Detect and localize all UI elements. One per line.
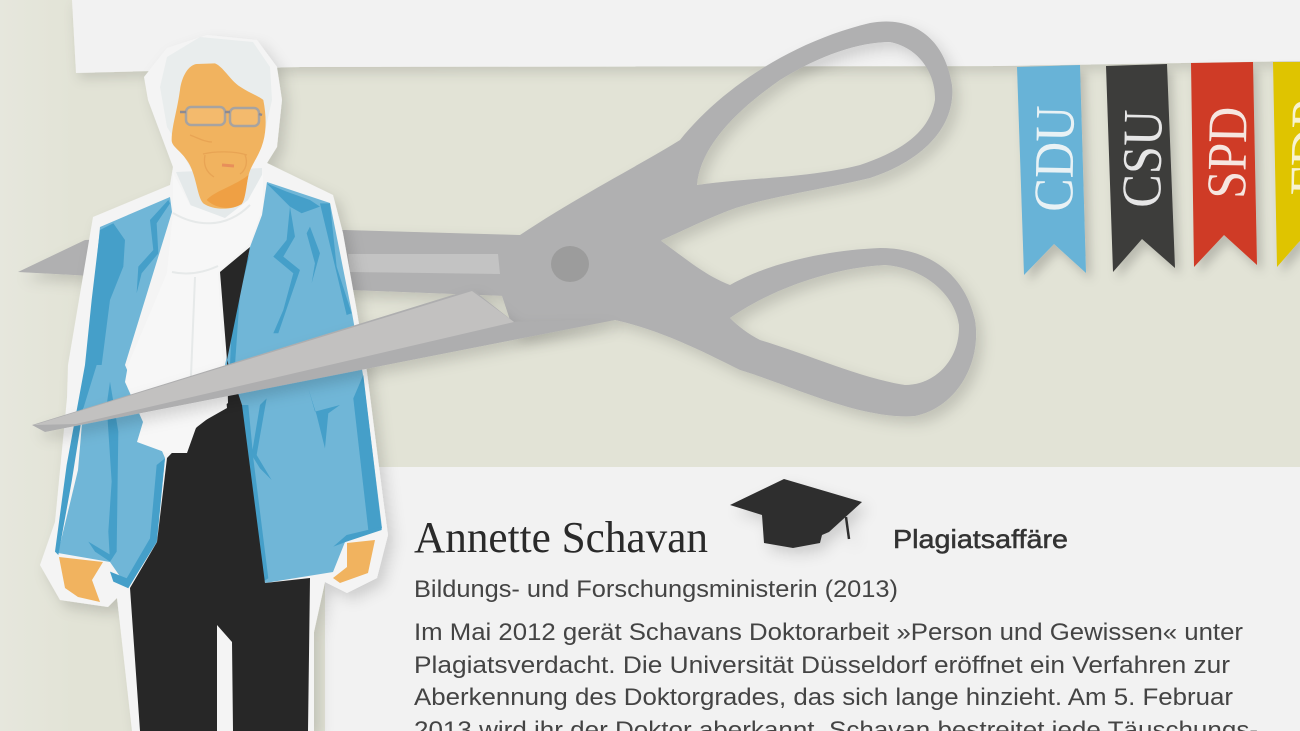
trousers and top: [130, 247, 310, 731]
scissors upper blade and handle: [18, 22, 952, 300]
scissors pivot screw: [551, 246, 589, 282]
scarf: [125, 173, 263, 453]
jacket folds upper: [85, 183, 352, 365]
blade bevel: [34, 291, 514, 425]
ribbon: CDU: CDU: [1023, 105, 1087, 212]
left hand: [59, 557, 103, 602]
ribbon: SPD: [1191, 62, 1260, 267]
jacket folds lower: [55, 365, 382, 588]
icon: party ribbons: [1017, 62, 1300, 275]
body text: [414, 619, 1258, 731]
face: [172, 63, 266, 209]
body text: Plagiatsverdacht. Die Universität Düsseldorf eröffnet ein Verfahren zur: [414, 652, 1230, 679]
neck shadow: [207, 175, 248, 208]
jacket left side: [58, 197, 172, 588]
ribbon: SPD: SPD: [1196, 106, 1260, 199]
scissors lower blade: [32, 289, 615, 432]
scarf shadow folds: [172, 205, 250, 400]
heading: name: Annette Schavan: [414, 513, 708, 562]
icon: graduation cap: [730, 479, 862, 548]
ribbon: CDU: [1017, 65, 1087, 275]
panel: top paper sheet: [72, 0, 1300, 73]
ribbon: CSU: [1106, 64, 1175, 272]
scissors upper blade bevel: [348, 254, 500, 274]
icon: scissors: [18, 22, 976, 416]
body text: Aberkennung des Doktorgrades, das sich lange hinzieht. Am 5. Februar: [414, 684, 1233, 711]
face details: [190, 135, 247, 177]
right hand: [333, 540, 375, 583]
label: Plagiatsaffäre: Plagiatsaffäre: [893, 524, 1068, 554]
jacket right side: [225, 182, 382, 583]
illustration: Annette Schavan: [40, 35, 388, 731]
scissors lower handle: [500, 240, 976, 416]
hair: [160, 37, 272, 185]
panel: bottom text panel: [325, 467, 1300, 731]
person white cut-out outline: [40, 35, 388, 731]
body text: Im Mai 2012 gerät Schavans Doktorarbeit »Person und Gewissen« unter: [414, 619, 1243, 646]
ribbon: CSU: CSU: [1111, 109, 1175, 208]
scarf neck shadow: [176, 168, 262, 222]
glasses: [180, 107, 262, 126]
ribbon: FDP: [1273, 62, 1300, 267]
subtitle: office: Bildungs- und Forschungsministerin (2013): [414, 576, 898, 603]
